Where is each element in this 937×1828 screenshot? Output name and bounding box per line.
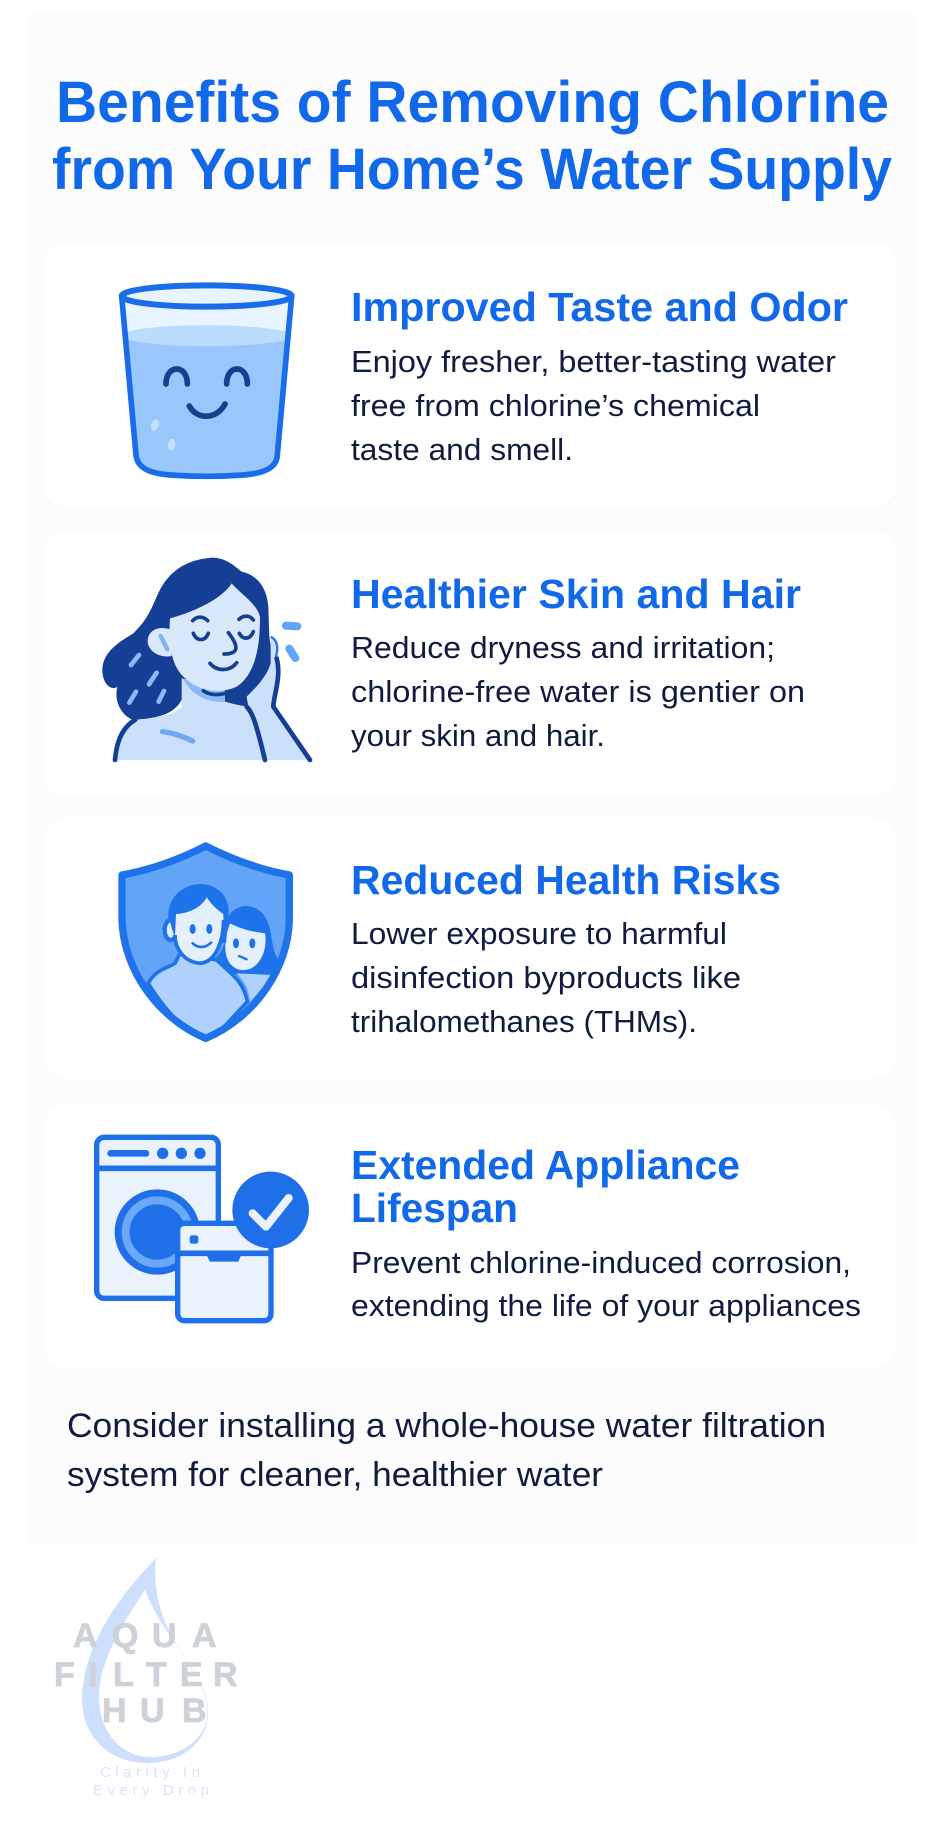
title: Benefits of Removing Chlorine — [56, 70, 889, 135]
text: extended appliance description: Prevent chlorine-induced corrosion, — [351, 1245, 851, 1280]
title: from Your Home’s Water Supply — [52, 137, 892, 202]
logo tagline — [93, 1764, 209, 1799]
text: healthier skin description: Reduce dryness and irritation; — [351, 630, 775, 665]
text: reduced health risks description: trihalomethanes (THMs). — [351, 1004, 697, 1039]
text: improved taste description — [351, 344, 836, 467]
heading: extended appliance lifespan: Extended Appliance — [351, 1142, 740, 1188]
text: extended appliance description — [351, 1245, 861, 1323]
logo tagline: Clarity In — [100, 1764, 200, 1781]
text: reduced health risks description: Lower exposure to harmful — [351, 916, 727, 951]
logo wordmark: HUB — [102, 1692, 207, 1730]
logo wordmark: AQUA — [73, 1617, 217, 1655]
icon: family inside shield — [122, 846, 289, 1047]
closing call to action: system for cleaner, healthier water — [67, 1456, 603, 1494]
panel: reduced health risks — [118, 842, 780, 1042]
text: extended appliance description: extending the life of your appliances — [351, 1288, 861, 1323]
text: improved taste description: taste and smell. — [351, 432, 573, 467]
closing call to action — [67, 1407, 826, 1494]
panel: healthier skin and hair — [43, 531, 897, 796]
heading: extended appliance lifespan — [351, 1142, 740, 1231]
icon: smiling water glass — [122, 285, 292, 476]
panel: extended appliance lifespan — [43, 1104, 897, 1368]
icon: washer and dishwasher with check mark — [97, 1137, 309, 1321]
closing call to action: Consider installing a whole-house water filtration — [67, 1407, 826, 1445]
logo: Aqua Filter Hub watermark — [54, 1558, 238, 1799]
icon: woman with healthy hair — [102, 558, 310, 760]
logo tagline: Every Drop — [93, 1782, 209, 1799]
text: improved taste description: free from chlorine’s chemical — [351, 388, 760, 423]
text: healthier skin description: your skin and hair. — [351, 718, 605, 753]
logo wordmark: FILTER — [54, 1656, 238, 1694]
heading: improved taste and odor: Improved Taste and Odor — [351, 284, 848, 330]
title — [52, 70, 892, 202]
heading: reduced health risks: Reduced Health Risks — [351, 857, 781, 903]
panel: improved taste and odor — [43, 242, 897, 507]
panel: main background — [29, 12, 914, 1545]
heading: extended appliance lifespan: Lifespan — [351, 1185, 518, 1231]
icon: water drop — [82, 1558, 208, 1763]
logo wordmark — [54, 1617, 238, 1730]
text: improved taste description: Enjoy fresher, better-tasting water — [351, 344, 836, 379]
heading: healthier skin and hair: Healthier Skin and Hair — [351, 571, 801, 617]
text: reduced health risks description: disinfection byproducts like — [351, 960, 741, 995]
text: healthier skin description: chlorine-free water is gentier on — [351, 674, 805, 709]
text: healthier skin description — [351, 630, 805, 753]
text: reduced health risks description — [351, 916, 741, 1039]
